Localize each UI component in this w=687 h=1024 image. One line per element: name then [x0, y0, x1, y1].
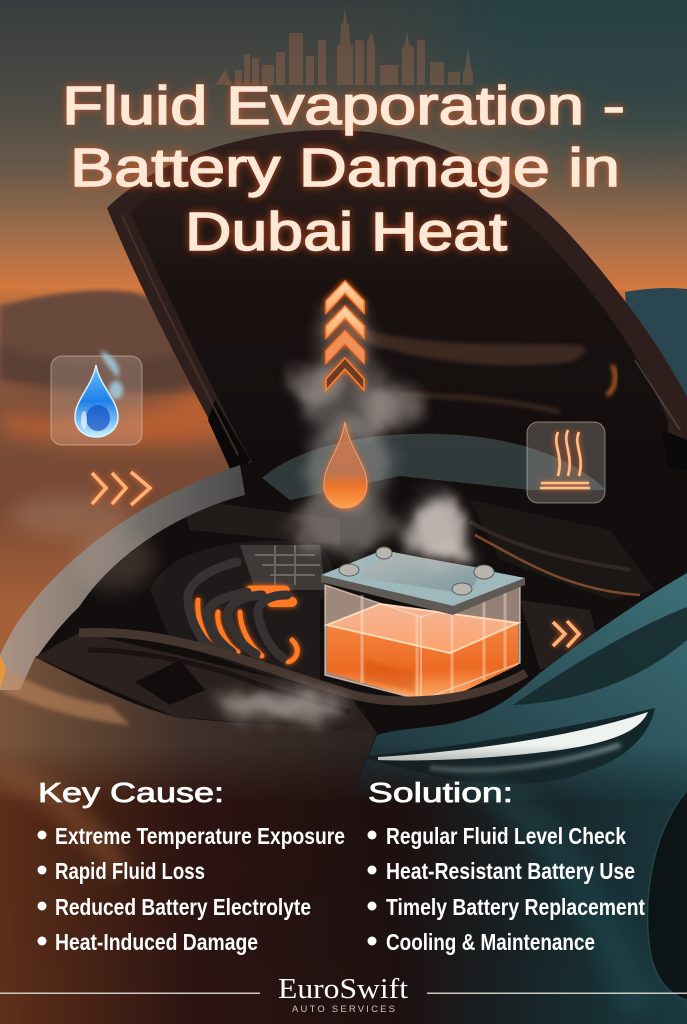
list: solutions	[368, 823, 645, 955]
open car hood	[107, 130, 687, 500]
list: solutions: Heat-Resistant Battery Use	[386, 858, 635, 884]
list: solutions: Regular Fluid Level Check	[386, 823, 626, 849]
footer logo: AUTO SERVICES	[292, 1004, 395, 1015]
dark lower band	[0, 745, 687, 1024]
engine bay interior	[20, 450, 687, 745]
bay lower lip	[79, 632, 526, 712]
skyline of Dubai	[215, 6, 473, 85]
arrow: right chevrons at battery	[553, 621, 579, 647]
right wing shadow	[513, 607, 687, 705]
list: key causes: Rapid Fluid Loss	[55, 858, 205, 884]
arrow: right chevrons	[92, 472, 150, 505]
title	[62, 76, 625, 262]
list: solutions: Cooling & Maintenance	[386, 929, 595, 955]
background: dusk sky	[0, 0, 687, 296]
list: key causes	[38, 823, 345, 955]
headlight	[358, 708, 655, 784]
cowl panels	[180, 498, 655, 670]
icon panel: heat waves	[527, 422, 605, 503]
glowing exhaust manifold	[188, 562, 297, 662]
body: front fender and lower panel	[0, 465, 377, 800]
engine block	[150, 540, 333, 695]
desert haze	[10, 493, 155, 590]
title: Battery Damage in	[70, 138, 620, 198]
panel: key cause	[38, 777, 345, 955]
title: Dubai Heat	[185, 202, 507, 262]
car roof and windshield	[625, 288, 687, 420]
arrow: upward chevrons	[326, 281, 364, 390]
panel: solution	[368, 777, 645, 955]
list: solutions: Timely Battery Replacement	[386, 894, 645, 920]
background: desert dunes	[0, 285, 687, 715]
heading: solution: Solution:	[368, 777, 513, 808]
heading: key cause: Key Cause:	[38, 777, 224, 808]
footer logo: EuroSwift	[278, 973, 408, 1005]
footer logo	[0, 973, 687, 1015]
list: key causes: Reduced Battery Electrolyte	[55, 894, 311, 920]
icon: orange fluid drop	[324, 422, 367, 508]
list: key causes: Extreme Temperature Exposure	[55, 823, 345, 849]
steam clouds	[215, 300, 473, 719]
teal hood panel right	[350, 573, 687, 800]
icon panel: blue water drop	[51, 350, 142, 445]
title: Fluid Evaporation -	[62, 76, 625, 136]
windshield reflection	[262, 434, 606, 500]
transparent battery	[321, 547, 525, 700]
list: key causes: Heat-Induced Damage	[55, 929, 258, 955]
